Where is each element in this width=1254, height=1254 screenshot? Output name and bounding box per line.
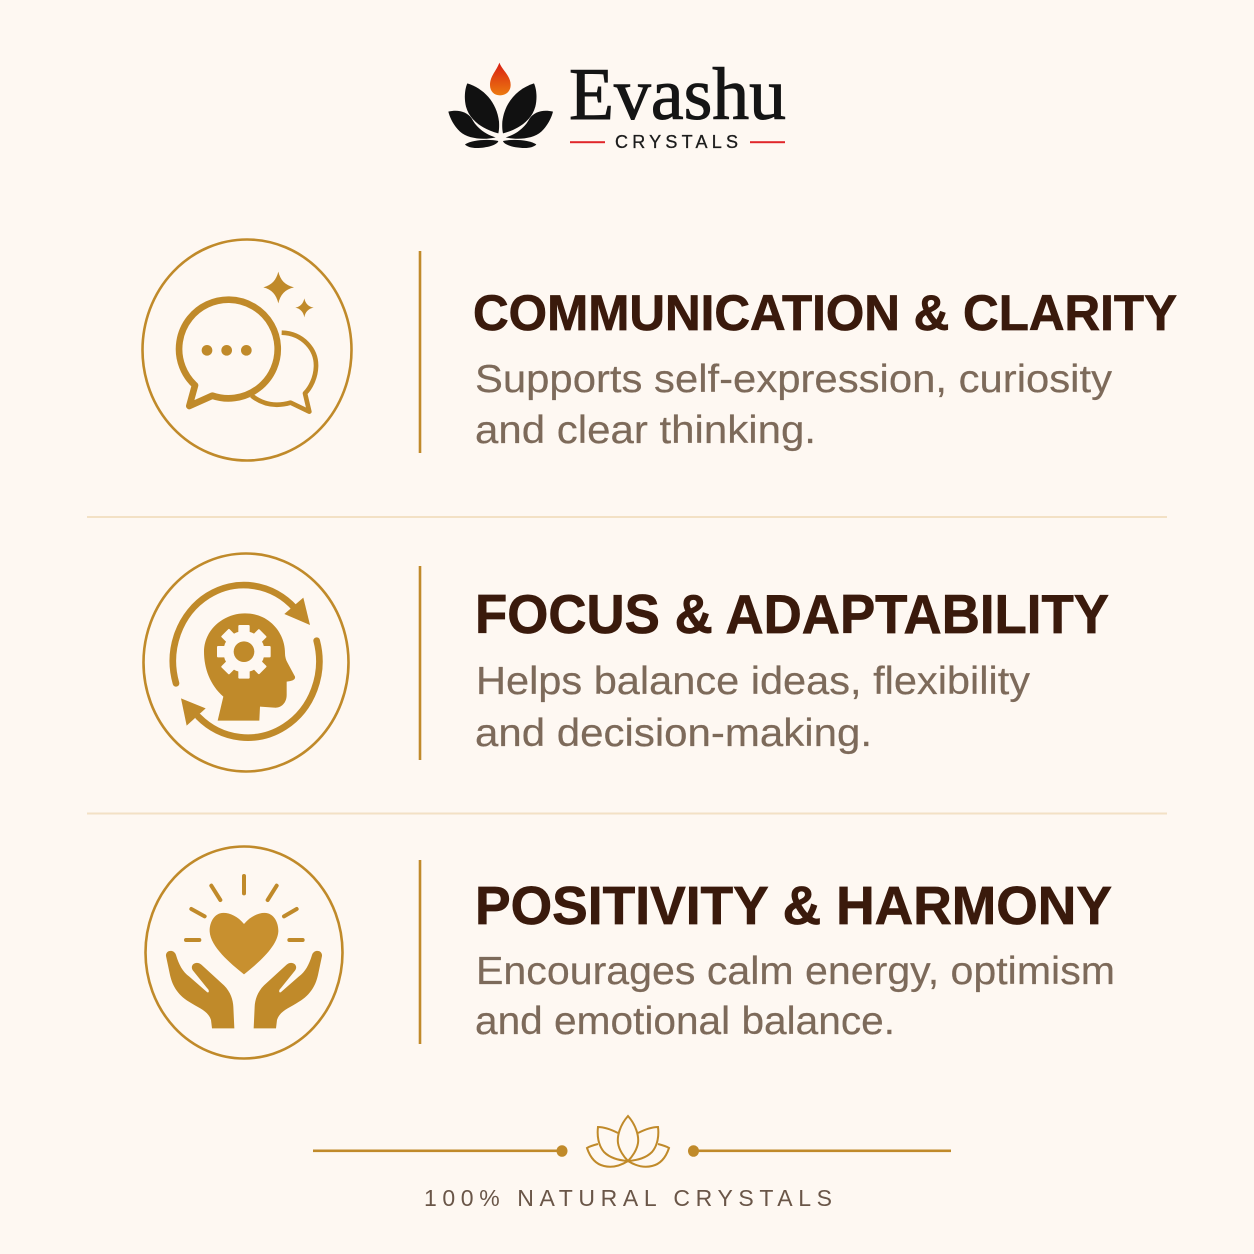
text block <box>475 950 1115 1043</box>
logo wordmark: Evashu <box>569 54 786 136</box>
footer ornament <box>313 1116 951 1167</box>
icon: speech bubbles <box>142 240 352 460</box>
panel: focus and adaptability <box>144 554 1109 772</box>
text block <box>475 358 1113 452</box>
icon: heart and hands <box>146 846 342 1058</box>
text block: Encourages calm energy, optimism <box>476 950 1115 993</box>
text block: and clear thinking. <box>475 409 816 452</box>
footer text: 100% NATURAL CRYSTALS <box>424 1185 832 1211</box>
icon: lotus outline <box>587 1116 669 1167</box>
logo <box>448 54 786 152</box>
heading: POSITIVITY & HARMONY <box>475 876 1112 936</box>
icon: head with gear <box>144 554 348 772</box>
panel: communication and clarity <box>142 240 1177 460</box>
text block: and decision-making. <box>475 712 872 755</box>
logo lotus icon <box>448 63 553 148</box>
logo subtitle: CRYSTALS <box>615 132 738 152</box>
panel: positivity and harmony <box>146 846 1115 1058</box>
text block: Supports self-expression, curiosity <box>475 358 1113 401</box>
text block <box>475 660 1031 755</box>
text block: Helps balance ideas, flexibility <box>476 660 1031 703</box>
text block: and emotional balance. <box>475 1000 895 1043</box>
heading: COMMUNICATION & CLARITY <box>473 285 1177 341</box>
heading: FOCUS & ADAPTABILITY <box>475 583 1109 645</box>
